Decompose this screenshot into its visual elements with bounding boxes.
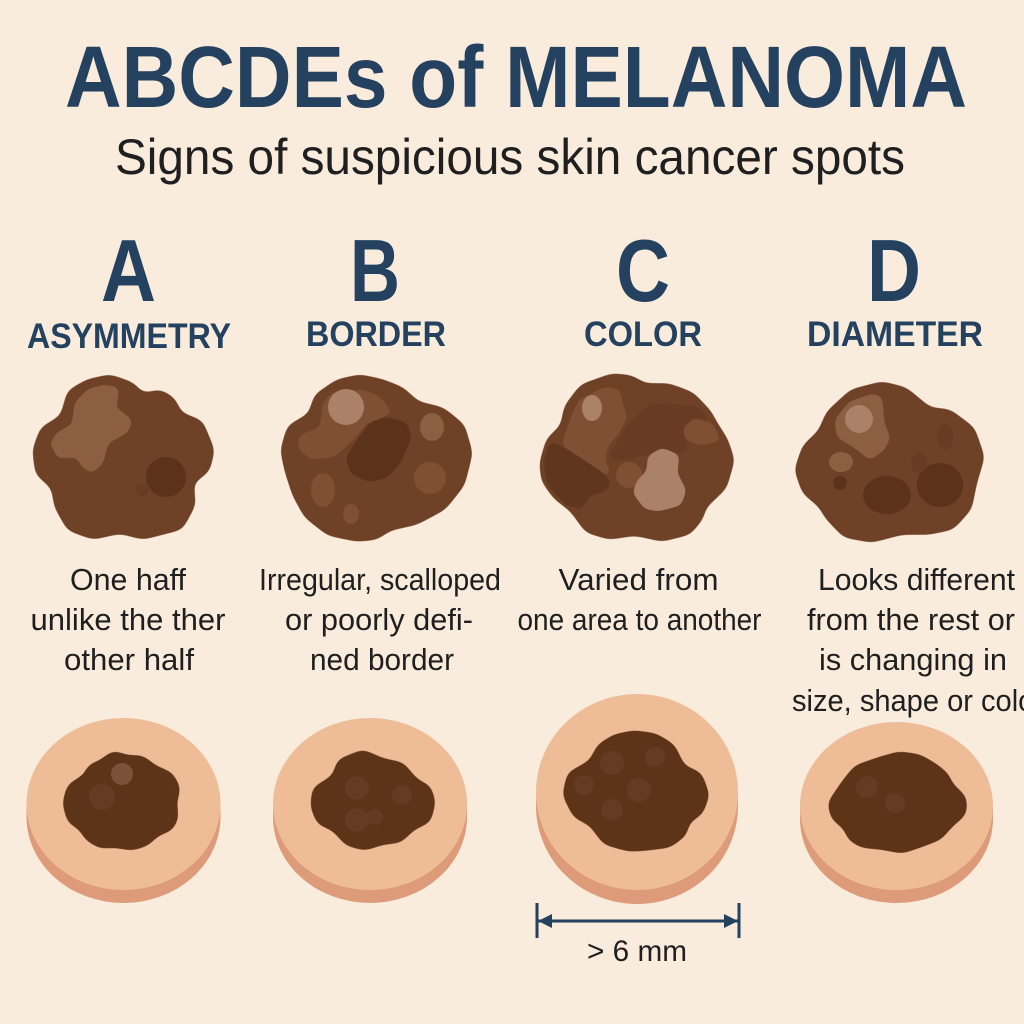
description B: or poorly defi- <box>285 602 473 637</box>
description D <box>792 562 1024 718</box>
heading: diameter: DIAMETER <box>807 315 983 354</box>
heading: border: BORDER <box>306 315 446 354</box>
heading: asymmetry: ASYMMETRY <box>27 317 231 356</box>
subtitle: Signs of suspicious skin cancer spots <box>115 129 905 185</box>
panel: border <box>259 221 501 903</box>
icon: skin disk B <box>273 718 467 903</box>
description B: Irregular, scalloped <box>259 562 501 597</box>
panel: color <box>518 221 762 968</box>
description B: ned border <box>310 642 454 677</box>
description B <box>259 562 501 677</box>
heading: color: COLOR <box>584 315 702 354</box>
description D: from the rest or <box>807 602 1015 637</box>
panel: asymmetry <box>26 221 231 903</box>
icon: diameter mole <box>795 382 984 542</box>
icon: varied colour mole <box>540 374 734 541</box>
arrow: diameter measure <box>537 903 739 938</box>
description A: other half <box>64 642 194 677</box>
letter B: B <box>350 221 400 320</box>
icon: irregular border mole <box>281 375 472 541</box>
letter D: D <box>867 221 921 320</box>
icon: skin disk A <box>26 718 220 903</box>
panel: diameter <box>792 221 1024 903</box>
description C: one area to another <box>518 602 762 637</box>
description A: unlike the ther <box>30 602 225 637</box>
icon: skin disk D <box>800 722 993 903</box>
description C <box>518 562 762 637</box>
description D: Looks different <box>818 562 1015 597</box>
icon: skin disk C <box>536 694 738 904</box>
label: greater than 6 mm: > 6 mm <box>587 935 687 968</box>
icon: asymmetric mole <box>33 375 214 539</box>
description C: Varied from <box>558 562 718 597</box>
letter A: A <box>101 221 156 320</box>
description A <box>30 562 225 677</box>
description D: is changing in <box>819 642 1007 677</box>
description A: One haff <box>70 562 186 597</box>
letter C: C <box>616 221 670 320</box>
